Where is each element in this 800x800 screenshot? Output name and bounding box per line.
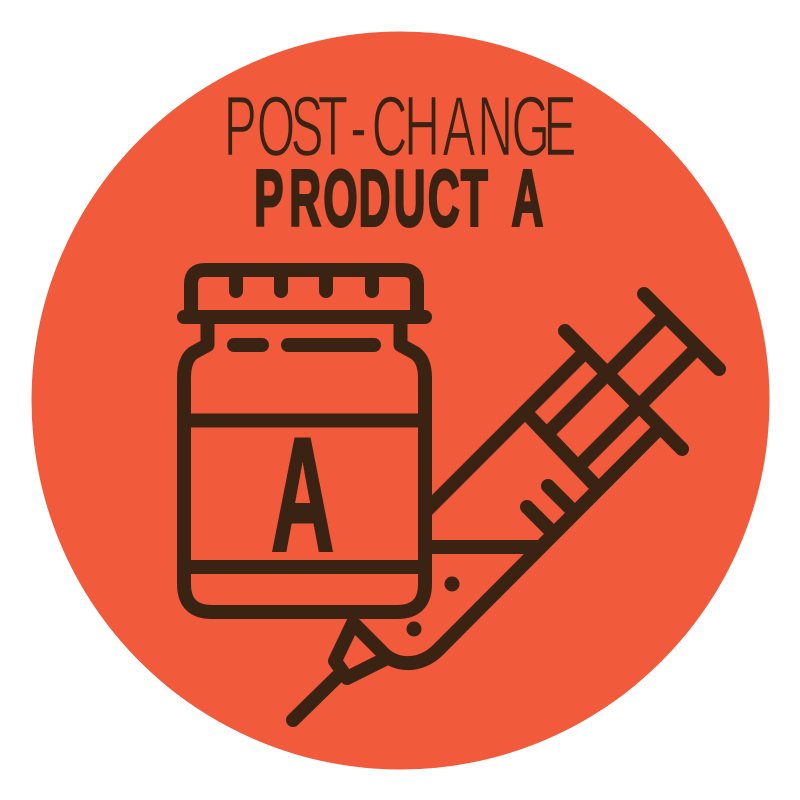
- jar markings: [234, 338, 374, 352]
- plunger seal: [530, 417, 593, 483]
- barrel top edge: [425, 357, 580, 512]
- barrel flange: [565, 331, 682, 449]
- liquid bubbles: [406, 576, 460, 636]
- syringe nozzle: [335, 623, 387, 678]
- label band bottom: [184, 560, 425, 574]
- liquid level line: [431, 540, 540, 554]
- icon: syringe: [293, 294, 719, 720]
- barrel bottom edge and tip: [355, 432, 655, 663]
- heading: post-change: POST-CHANGE: [224, 78, 576, 174]
- lid rim: [184, 310, 425, 324]
- lid ridges: [236, 272, 372, 291]
- heading: product a: PRODUCT A: [254, 154, 543, 243]
- needle: [293, 677, 337, 720]
- jar lid: [191, 270, 417, 317]
- jar label letter: A: [271, 404, 334, 585]
- plunger flange: [644, 294, 719, 369]
- icon: vial jar: [184, 270, 425, 612]
- jar body: [184, 317, 425, 612]
- plunger rods: [550, 321, 692, 462]
- scale ticks: [527, 486, 570, 529]
- label band top: [184, 414, 425, 428]
